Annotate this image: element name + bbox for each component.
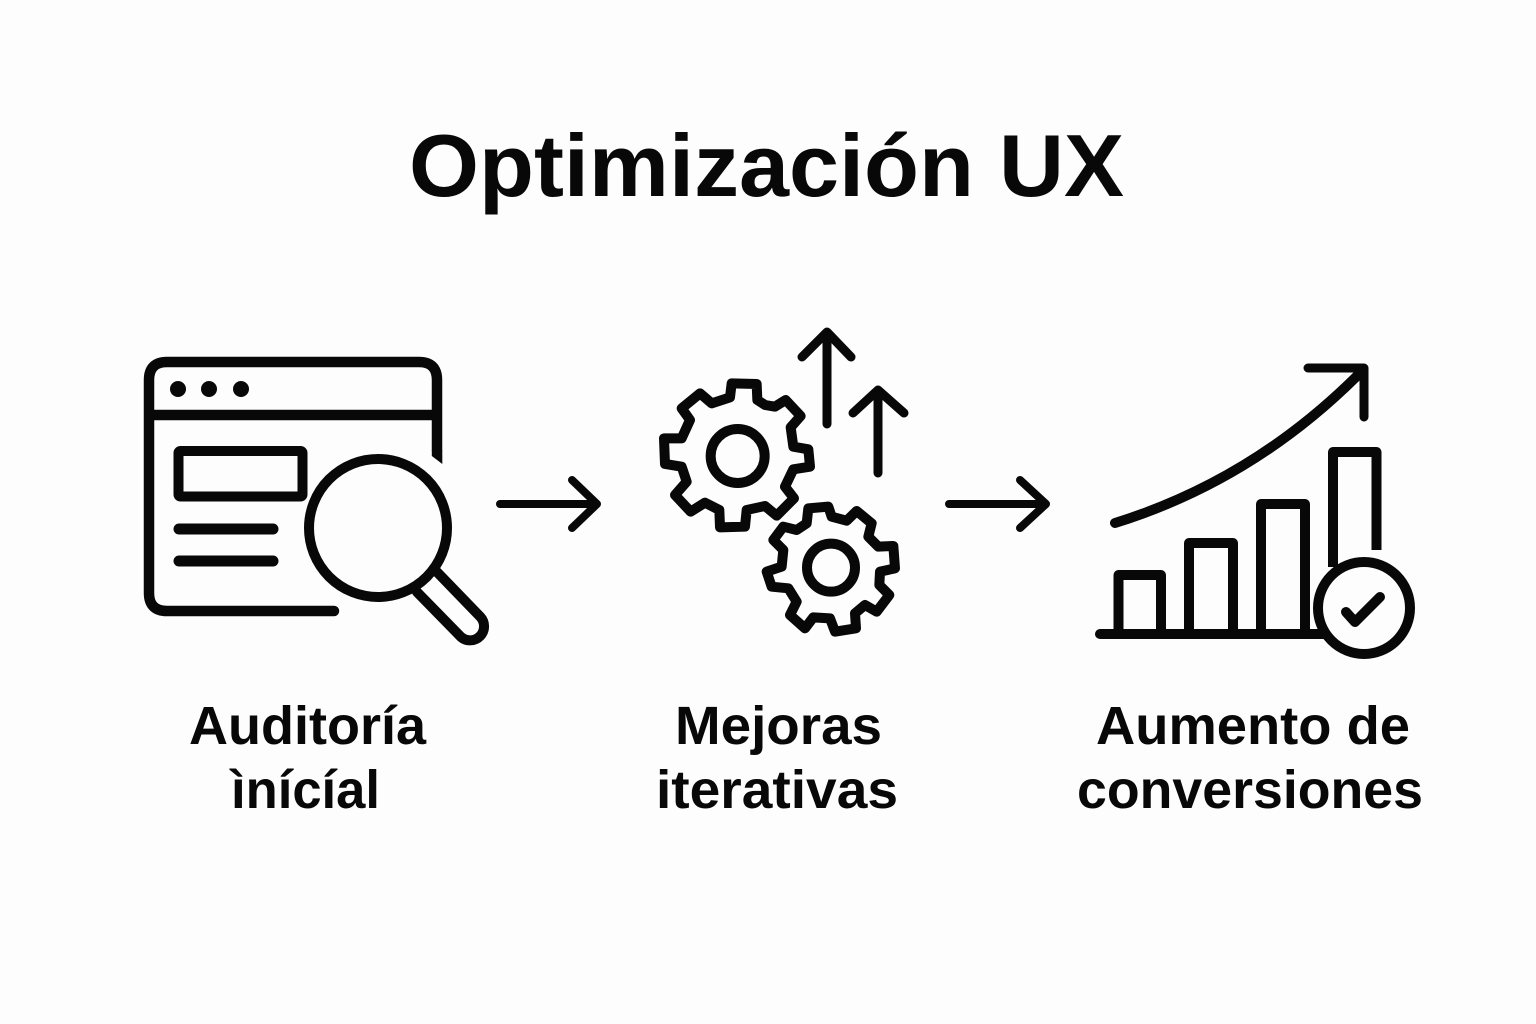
content box	[178, 451, 302, 496]
label: iterative improvements	[656, 696, 898, 820]
icon: tall up arrow	[802, 332, 851, 424]
label: initial audit: ìnícíal	[229, 760, 380, 820]
chart baseline	[1100, 629, 1325, 639]
growth curve	[1115, 371, 1362, 523]
arrow: audit to improvements	[500, 480, 597, 528]
bars	[1118, 452, 1376, 634]
growth arrow head	[1308, 368, 1364, 417]
label: initial audit: Auditoría	[189, 696, 427, 756]
icon: small gear	[767, 507, 895, 632]
label: iterative improvements: Mejoras	[675, 696, 882, 756]
icon: large gear	[664, 383, 810, 527]
icon: browser window with magnifying glass	[149, 362, 484, 640]
label: iterative improvements: iterativas	[656, 760, 898, 820]
label: initial audit	[189, 696, 427, 820]
icon: short up arrow	[853, 390, 904, 473]
window header bar	[149, 410, 437, 420]
arrow: improvements to conversions	[949, 480, 1046, 528]
icon: bar chart with growth arrow and check badge	[1100, 368, 1410, 654]
browser window frame	[149, 362, 437, 611]
title: Optimización UX	[409, 116, 1124, 215]
window frame cut end	[432, 450, 442, 464]
text lines	[179, 529, 273, 561]
label: conversion increase: conversiones	[1077, 760, 1423, 820]
label: conversion increase	[1077, 696, 1423, 820]
magnifying glass	[309, 459, 484, 640]
label: conversion increase: Aumento de	[1096, 696, 1410, 756]
check badge	[1318, 562, 1410, 654]
window control dots	[170, 381, 249, 397]
